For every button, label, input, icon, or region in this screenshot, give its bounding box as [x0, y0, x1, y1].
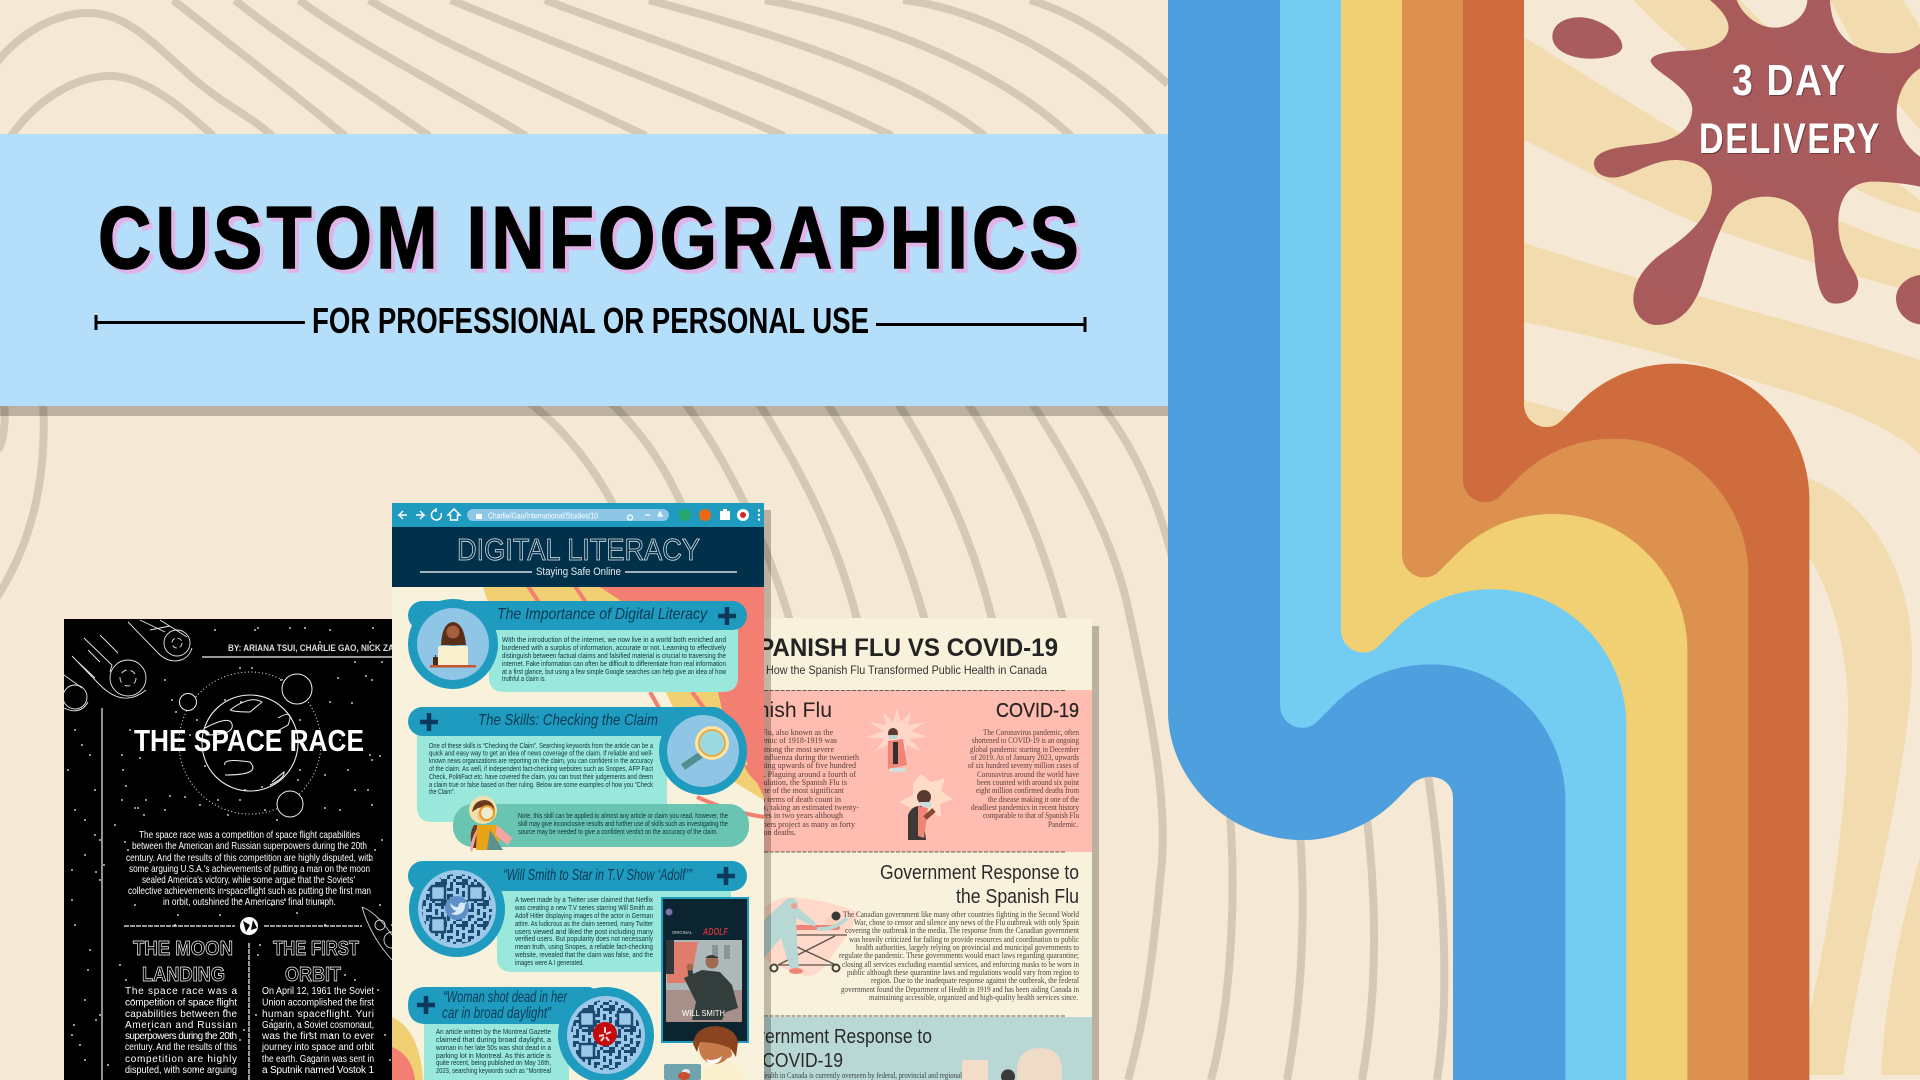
spanish flu text: to fifty million deaths.	[724, 828, 796, 837]
section: pink comparison	[764, 690, 1092, 1016]
card text: the Claim”.	[429, 789, 455, 796]
badge text: 3 DAY	[1732, 56, 1847, 105]
spanish flu text: influenza pandemic of 1918-1919 was	[714, 736, 837, 745]
card text: mean truth, using Snopes, a reliable fact-checking	[515, 944, 653, 951]
body text: covering the outbreak in the media. The response from the Canadian government	[845, 926, 1080, 935]
extension icons	[679, 509, 759, 521]
covid text: been counted with around six point	[977, 778, 1080, 787]
poster title: DIGITAL LITERACY	[457, 532, 700, 567]
card text: 2023, searching keywords such as “Montreal	[436, 1068, 551, 1075]
column text: disputed, with some arguing	[125, 1065, 237, 1076]
body text start: Health in Canada is currently overseen by federal, provincial and regional	[760, 1071, 963, 1080]
note text: Note, this skill can be applied to almost any article or claim you read, however, the	[518, 813, 728, 820]
card: woman shot dead	[408, 987, 654, 1080]
panel: spanish flu vs covid poster	[764, 618, 1092, 1080]
stripe: light blue	[1168, 0, 1626, 1080]
card header pill	[408, 987, 620, 1024]
spanish flu text: considered one of the most significant	[722, 786, 845, 795]
body text: region. Due to the inadequate response against the outbreak, the federal	[871, 976, 1080, 985]
card heading: The Skills: Checking the Claim	[478, 712, 658, 729]
covid text: global pandemic starting in December	[970, 745, 1079, 754]
card text: attire. As ludicrous as the claim seemed, many Twitter	[515, 921, 654, 928]
heading: covid-19: COVID-19	[996, 700, 1079, 722]
banner band	[0, 134, 1168, 406]
background: right-side tan waves	[1520, 0, 1920, 1075]
toolbar navigation icons	[399, 508, 460, 520]
card text box	[497, 885, 731, 972]
column text: century. And the results of this	[125, 1042, 237, 1053]
card text	[502, 637, 727, 683]
column: the moon landing	[125, 938, 237, 1076]
banner shadow	[0, 404, 1168, 416]
intro paragraph: The space race was a competition of space flight capabilities	[139, 829, 360, 841]
section: government response to the spanish flu	[764, 862, 1080, 1002]
body text: closing all services excluding essential services, and enforcing masks to be worn in	[842, 960, 1079, 969]
spanish flu text: pandemics in terms of death count in	[723, 795, 841, 804]
tweet photo	[666, 940, 742, 1022]
card circle	[408, 599, 498, 689]
column text: On April 12, 1961 the Soviet	[262, 986, 374, 997]
card header pill	[408, 861, 747, 891]
covid text: shortened to COVID-19 is an ongoing	[972, 736, 1079, 745]
meteors	[63, 620, 192, 711]
column text: the earth. Gagarin was sent in	[262, 1054, 374, 1065]
stripe: blue	[1168, 0, 1565, 1080]
header rules	[420, 571, 737, 573]
card text box	[417, 730, 667, 822]
body text: was heavily criticized for failing to provide resources and coordination to public	[849, 935, 1079, 944]
card text: quick and easy way to get an idea of news coverage of the claim. If reliable and well-	[429, 750, 654, 758]
stripe: yellow	[1168, 0, 1687, 1080]
poster background	[392, 503, 764, 1080]
poster subtitle: Staying Safe Online	[536, 566, 621, 578]
body text: government found the Department of Health in 1919 and has been aiding Canada in	[841, 985, 1079, 994]
icon: plus	[420, 713, 438, 731]
intro paragraph: collective achievements in spaceflight such as putting the first man	[128, 885, 371, 897]
spanish poster drop shadow	[1092, 626, 1099, 1080]
heading: spanish flu: Spanish Flu	[720, 699, 832, 722]
rainbow stripes	[1168, 0, 1809, 1080]
panel: digital literacy browser poster	[392, 503, 764, 1080]
card text: website, revealed that the claim was false, and the	[514, 952, 653, 959]
body text: War, chose to censor and silence any news of the Flu outbreak with only Spain	[854, 918, 1079, 927]
stripe: orange	[1168, 0, 1748, 1080]
card header pill	[408, 707, 728, 736]
column text: The space race was a	[125, 986, 237, 997]
card text: Adolf Hitler displaying images of the actor in German	[515, 913, 653, 920]
column text: was the first man to ever	[261, 1031, 375, 1042]
heading line 2: the Spanish Flu	[956, 886, 1079, 908]
card text box	[489, 625, 738, 692]
background: top-left contour lines	[0, 0, 1168, 136]
qr code	[420, 872, 494, 946]
card circle	[558, 987, 654, 1080]
browser poster drop shadow	[764, 510, 771, 1080]
card heading: “Woman shot dead in her	[443, 989, 567, 1006]
covid text	[968, 728, 1080, 829]
note text: skill may give inconclusive results and further use of skills such as investigating the	[518, 821, 728, 828]
spanish flu text: outbreaks of influenza during the twentieth	[721, 753, 859, 762]
section: government response to covid-19	[733, 1017, 1092, 1080]
body text: public although these quarantine laws and regulations would vary from region to	[847, 968, 1079, 977]
banner	[0, 134, 1168, 416]
spanish flu text: some researchers project as many as forty	[721, 820, 855, 829]
stars	[68, 628, 392, 1070]
card text: A tweet made by a Twitter user claimed that Netflix	[515, 897, 653, 904]
card text: of the claim. As well, if independent fact-checking websites such as Snopes, AFP Fact	[429, 766, 653, 773]
column heading line 2: LANDING	[142, 964, 225, 986]
card heading: “Will Smith to Star in T.V Show ‘Adolf’”	[503, 867, 692, 884]
badge text	[1699, 56, 1881, 163]
card text: Check, PolitiFact etc. have covered the claim, you can trust their judgements and deem	[429, 774, 653, 781]
icon: plus	[717, 867, 735, 885]
covid text: The Coronavirus pandemic, often	[983, 728, 1079, 737]
covid text: deadliest pandemics in recent history	[971, 803, 1079, 812]
background: lower contour lines	[0, 400, 1444, 1080]
icon: boy with laptop	[664, 1026, 744, 1080]
spanish flu text	[764, 729, 859, 835]
intro paragraph: between the American and Russian superpowers during the 20th	[132, 840, 367, 852]
stripe: dark orange	[1168, 0, 1809, 1080]
panel: the space race poster	[63, 619, 406, 1080]
card text: images were A.I generated.	[515, 960, 584, 967]
column text: Union accomplished the first	[262, 998, 374, 1008]
rocket outline	[362, 907, 400, 960]
card text: claimed that during broad daylight, a	[436, 1037, 551, 1044]
url bar icons	[628, 512, 663, 520]
planet illustration	[179, 672, 321, 817]
column text: journey into space and orbit	[261, 1042, 374, 1053]
card text box	[424, 1018, 569, 1080]
url text: Charlie/Gao/International/Studies/10	[488, 512, 598, 520]
column text	[125, 986, 237, 1076]
paint splat	[1552, 0, 1920, 325]
icon: plus	[718, 607, 736, 625]
subtitle: FOR PROFESSIONAL OR PERSONAL USE	[312, 300, 869, 341]
poster header	[392, 527, 764, 587]
card: importance of digital literacy	[408, 599, 747, 692]
card text: With the introduction of the internet, we now live in a world both enriched and	[502, 637, 726, 644]
card header pill	[408, 601, 747, 630]
url bar	[467, 509, 669, 521]
spanish flu text: modern history, taking an estimated twenty-	[718, 803, 859, 812]
column text: superpowers during the 20th	[125, 1031, 237, 1042]
title: CUSTOM INFOGRAPHICS	[98, 188, 1083, 287]
icon: coughing person 2	[899, 774, 953, 840]
card text: verified users. But popularity does not necessarily	[515, 936, 653, 943]
intro paragraph: some arguing U.S.A.'s achievements of putting a man on the moon	[129, 863, 370, 875]
divider with globe	[124, 917, 362, 1080]
column heading: THE FIRST	[273, 938, 359, 960]
card text: An article written by the Montreal Gazette	[436, 1029, 551, 1036]
illustration: stretcher	[764, 897, 860, 976]
browser toolbar	[392, 503, 764, 527]
spanish flu text: the world's population, the Spanish Flu is	[715, 778, 847, 787]
spanish flu text: considered among the most severe	[724, 745, 834, 754]
spanish flu text: five million lives in two years although	[717, 811, 843, 820]
card text	[429, 743, 654, 796]
byline and margin rules	[102, 657, 392, 1080]
intro paragraph: sealed America's victory, while some argue that the Soviets'	[142, 874, 355, 886]
body text: maintaining accessible, organized and high-quality health services since.	[869, 993, 1078, 1002]
icon: girl with magnifier	[469, 796, 512, 852]
card text: parking lot in Montreal. As this article is	[436, 1053, 551, 1060]
card circle	[409, 861, 505, 957]
column: the first orbit	[261, 938, 375, 1076]
column text: a Sputnik named Vostok 1	[262, 1065, 374, 1076]
card text: known news organizations are reporting on the claim, you can confident in the accuracy	[429, 758, 653, 765]
icon: coughing person 1	[866, 709, 927, 772]
spanish flu text: million people. Plaguing around a fourth of	[717, 770, 856, 779]
body text: health authorities, largely relying on provincial and municipal governments to	[856, 943, 1079, 952]
intro paragraph: century. And the results of this competition are highly disputed, with	[126, 852, 373, 864]
note text	[518, 813, 728, 836]
covid text: eight million confirmed deaths from	[976, 786, 1080, 795]
tweet show title: ADOLF	[702, 927, 729, 938]
icon: woman at laptop	[430, 622, 476, 668]
delivery badge	[1552, 0, 1920, 325]
spanish flu text: century, infecting upwards of five hundred	[720, 761, 856, 770]
poster background	[64, 619, 392, 1080]
tweet screenshot	[662, 898, 748, 1042]
covid text: comparable to that of Spanish Flu	[983, 811, 1079, 820]
spanish flu text: The Spanish Flu, also known as the	[719, 728, 833, 737]
tweet label: ORIGINAL	[672, 930, 692, 935]
card text: internet. Fake information can often be difficult to differentiate from real information	[502, 661, 726, 668]
covid text: of six hundred seventy million cases of	[968, 761, 1079, 770]
card text: burdened with a surplus of information, accurate or not. Learning to effectively	[502, 645, 726, 652]
tweet poster caption: WILL SMITH	[682, 1009, 725, 1018]
qr code	[569, 998, 643, 1072]
note text: source may be needed to give a confident verdict on the accuracy of the claim.	[518, 829, 718, 836]
body text: regulate the pandemic. These governments would enact laws regarding quarantine;	[839, 951, 1079, 960]
icon: magnifying glass	[683, 728, 726, 767]
column text	[261, 986, 375, 1076]
column text: American and Russian	[125, 1020, 237, 1031]
heading: Government Response to	[733, 1026, 932, 1048]
card text: was creating a new T.V series starring Will Smith as	[514, 905, 653, 912]
illustration: healthcare figure	[962, 1048, 1062, 1080]
card text: a claim true or false based on their ruling. Below are some examples of how you “Check	[429, 782, 653, 789]
tweet avatar	[666, 908, 672, 916]
poster background	[771, 618, 1092, 1017]
url padlock	[476, 514, 482, 519]
poster title: THE SPACE RACE	[134, 723, 364, 758]
card: will smith to star	[408, 861, 748, 1042]
card heading line 2: car in broad daylight”	[442, 1005, 551, 1022]
column text: competition of space flight	[125, 998, 237, 1008]
column text: competition are highly	[125, 1054, 237, 1065]
covid text: of 2019. As of January 2023, upwards	[971, 753, 1079, 762]
card text: woman in her late 50s was shot dead in a	[435, 1045, 551, 1052]
covid text: Coronavirus around the world have	[977, 770, 1079, 779]
card text: truthful a claim is.	[502, 676, 546, 683]
decorative colour shapes	[392, 586, 764, 1080]
poster subtitle: How the Spanish Flu Transformed Public Health in Canada	[766, 663, 1047, 677]
note box	[453, 804, 749, 847]
heading: Government Response to	[880, 862, 1079, 884]
column text: capabilities between the	[125, 1009, 237, 1020]
card: checking the claim	[408, 707, 749, 852]
column heading line 2: ORBIT	[285, 964, 341, 986]
body text: The Canadian government like many other countries fighting in the Second World	[843, 910, 1079, 919]
card text: One of these skills is “Checking the Claim”. Searching keywords from the article can be a	[429, 743, 653, 750]
intro paragraph	[126, 829, 373, 908]
icon: plus	[417, 996, 435, 1014]
intro paragraph: in orbit, outshined the Americans' final triumph.	[163, 896, 336, 908]
covid text: the disease making it one of the	[988, 795, 1079, 804]
card text: quite recent, being published on May 16th,	[436, 1060, 551, 1067]
covid text: Pandemic.	[1048, 820, 1078, 829]
column heading: THE MOON	[133, 938, 233, 960]
card text: distinguish between factual claims and falsified material is crucial to traversing the	[502, 653, 726, 660]
heading line 2: the COVID-19	[733, 1050, 843, 1072]
column text: Gagarin, a Soviet cosmonaut,	[262, 1020, 374, 1031]
subtitle rules	[96, 315, 1085, 332]
card text	[514, 897, 654, 967]
icon: twitter badge	[445, 896, 469, 920]
card heading: The Importance of Digital Literacy	[497, 606, 708, 623]
card circle	[659, 707, 747, 795]
column text: human spaceflight. Yuri	[262, 1009, 374, 1020]
poster title: SPANISH FLU VS COVID-19	[742, 634, 1058, 662]
card text: at a first glance, but using a few simple Google searches can help give an idea of how	[502, 669, 727, 676]
card text	[435, 1029, 551, 1075]
icon: yelp badge	[593, 1022, 617, 1046]
card text: users viewed and liked the post including many	[515, 929, 653, 936]
byline: BY: ARIANA TSUI, CHARLIE GAO, NICK ZANG	[228, 643, 406, 653]
body text	[839, 910, 1080, 1002]
